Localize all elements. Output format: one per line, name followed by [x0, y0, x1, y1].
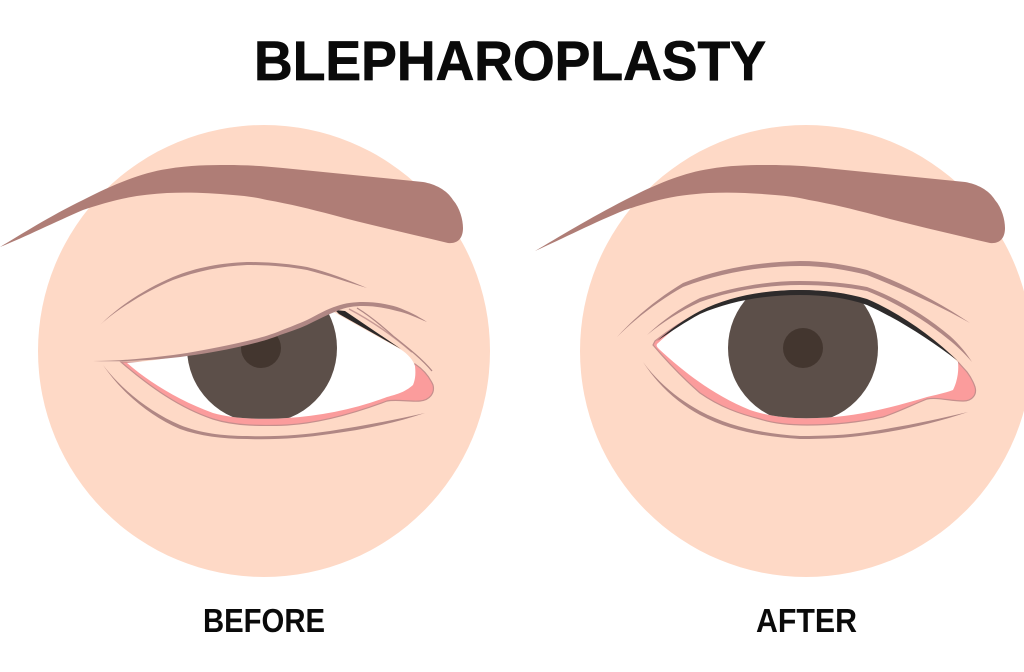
upper lid fold edge before	[93, 302, 427, 361]
lash line after	[657, 290, 958, 361]
lower lid crease before	[103, 365, 425, 439]
label: after: AFTER	[756, 602, 857, 639]
lash line before	[335, 310, 401, 349]
lower lid crease after	[643, 362, 968, 439]
waterline and caruncle before	[121, 362, 433, 425]
panel: after eye	[535, 125, 1024, 577]
eyebrow before	[0, 165, 463, 247]
iris after	[728, 290, 878, 418]
iris before	[187, 314, 337, 419]
title: BLEPHAROPLASTY	[254, 29, 766, 92]
panel: before eye	[0, 125, 490, 577]
eye white before	[127, 311, 415, 419]
upper lid line after	[647, 281, 972, 362]
eyebrow after	[535, 165, 1005, 251]
face circle before	[38, 125, 490, 577]
eyelid crease before	[100, 262, 367, 325]
eyelid crease after	[617, 261, 970, 337]
inner lid strip before	[349, 309, 412, 352]
label: before: BEFORE	[203, 602, 325, 639]
face circle after	[580, 125, 1024, 577]
eye white after	[657, 290, 958, 418]
outer corner crease before	[357, 308, 432, 371]
waterline and caruncle after	[653, 312, 976, 425]
